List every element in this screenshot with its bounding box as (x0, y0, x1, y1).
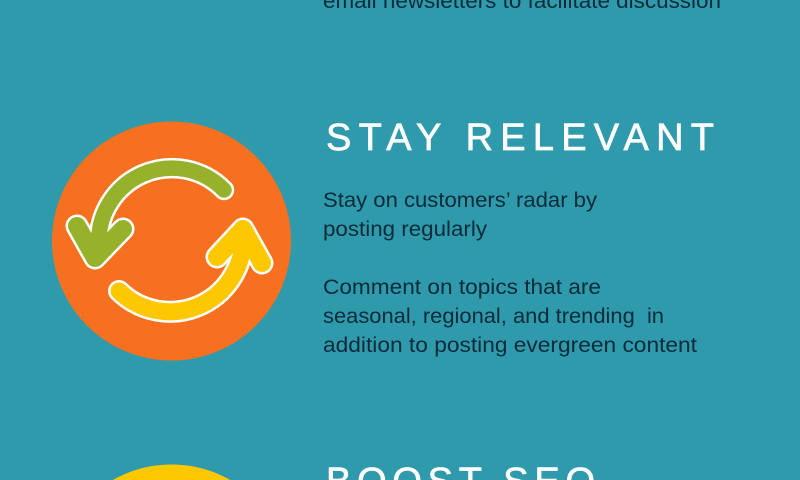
text block: stay on radar: posting regularly (323, 217, 487, 241)
text block: comment on topics: seasonal, regional, and trending in (323, 304, 664, 328)
icon: yellow circle (52, 464, 291, 480)
text block: stay on radar (323, 188, 597, 241)
icon: refresh arrows on orange circle (52, 122, 291, 360)
icon: yellow arrow (119, 229, 262, 312)
text block: comment on topics: addition to posting evergreen content (323, 333, 697, 357)
heading: stay relevant: STAY RELEVANT (326, 117, 714, 159)
icon: green arrow (77, 168, 224, 258)
text block: stay on radar: Stay on customers’ radar by (323, 188, 597, 212)
text block: comment on topics: Comment on topics that are (323, 275, 601, 299)
text block: comment on topics (323, 275, 697, 357)
